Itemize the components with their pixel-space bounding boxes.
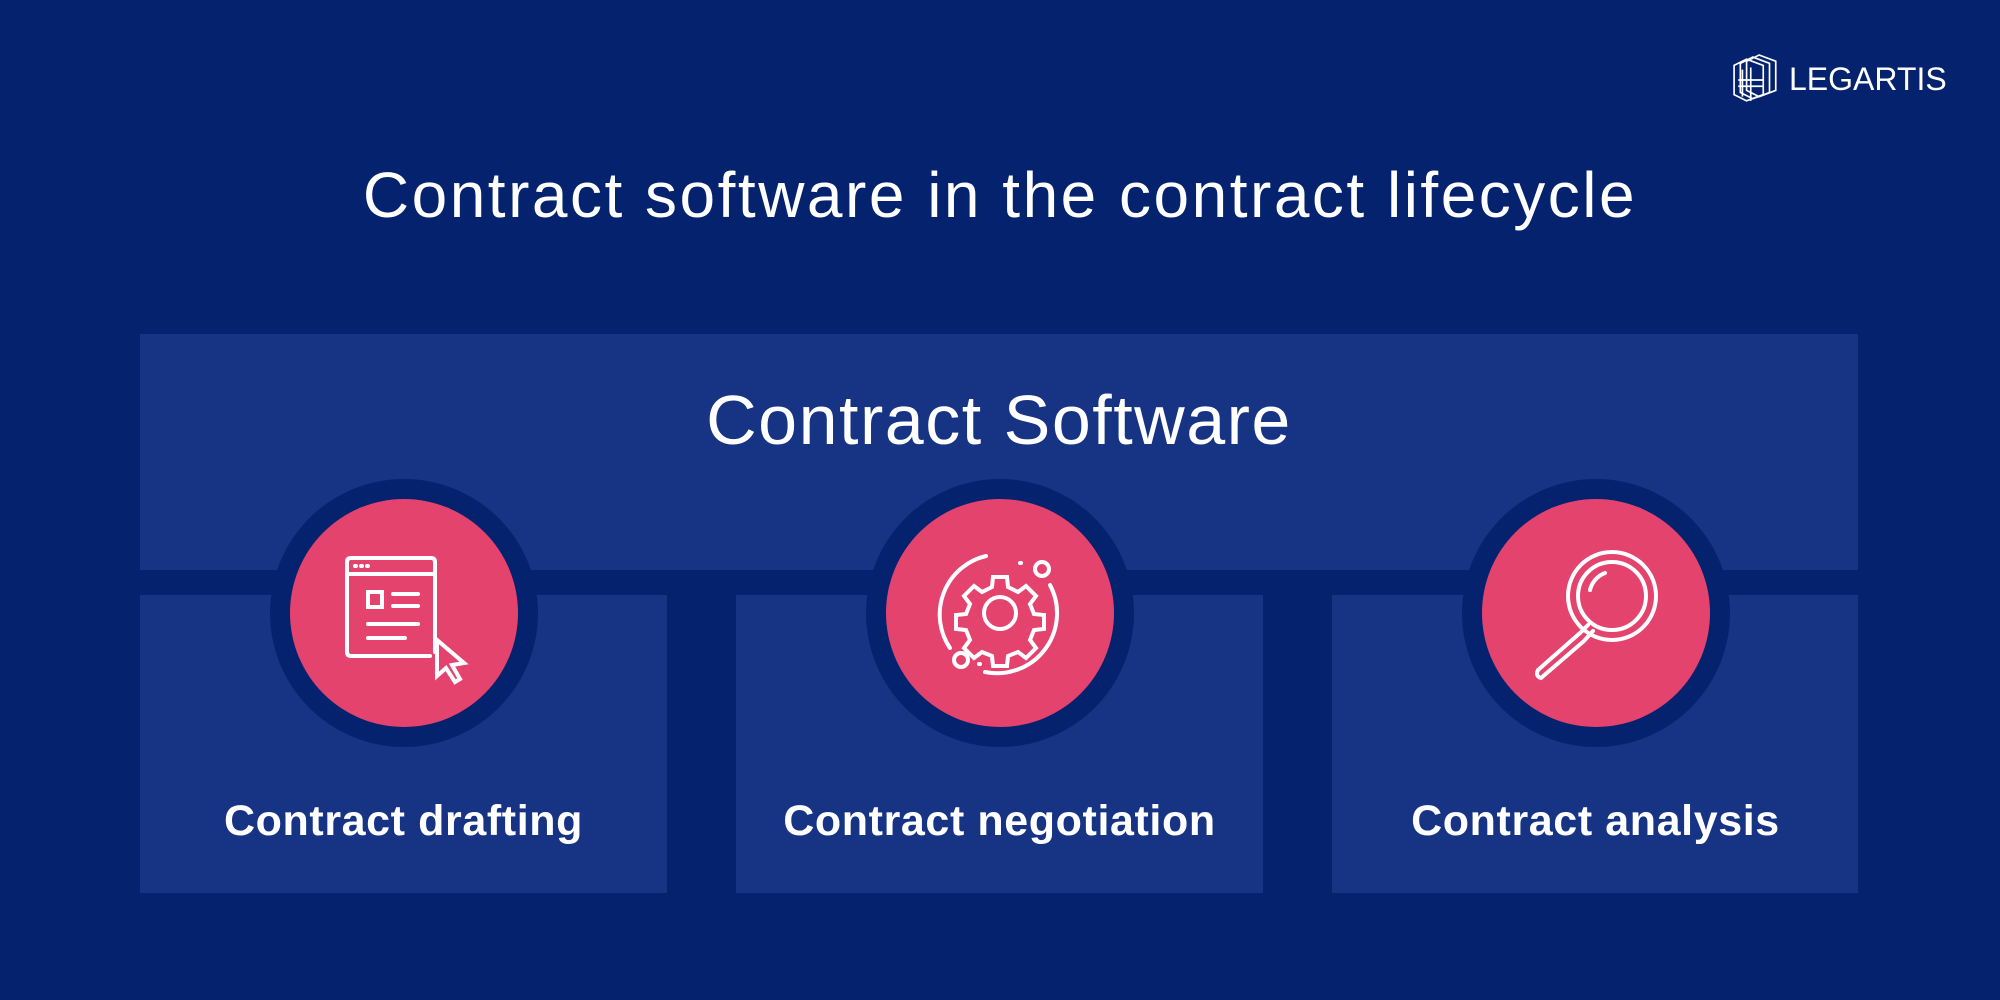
- label: negotiation: Contract negotiation: [783, 797, 1216, 845]
- logo: [1733, 54, 1947, 102]
- panel: analysis: [1332, 595, 1858, 893]
- icon: negotiation: [866, 479, 1134, 747]
- label: analysis: Contract analysis: [1411, 797, 1780, 845]
- heading: Contract Software: Contract Software: [706, 381, 1292, 459]
- title: Contract software in the contract lifecycle: [363, 159, 1637, 231]
- icon: logo mark: [1733, 54, 1777, 102]
- logo text: LEGARTIS: [1789, 61, 1947, 97]
- panel: drafting: [140, 595, 667, 893]
- icon: drafting: [270, 479, 538, 747]
- panel: contract software header: [140, 334, 1858, 570]
- label: drafting: Contract drafting: [224, 797, 583, 845]
- panel: negotiation: [736, 595, 1263, 893]
- icon: analysis: [1462, 479, 1730, 747]
